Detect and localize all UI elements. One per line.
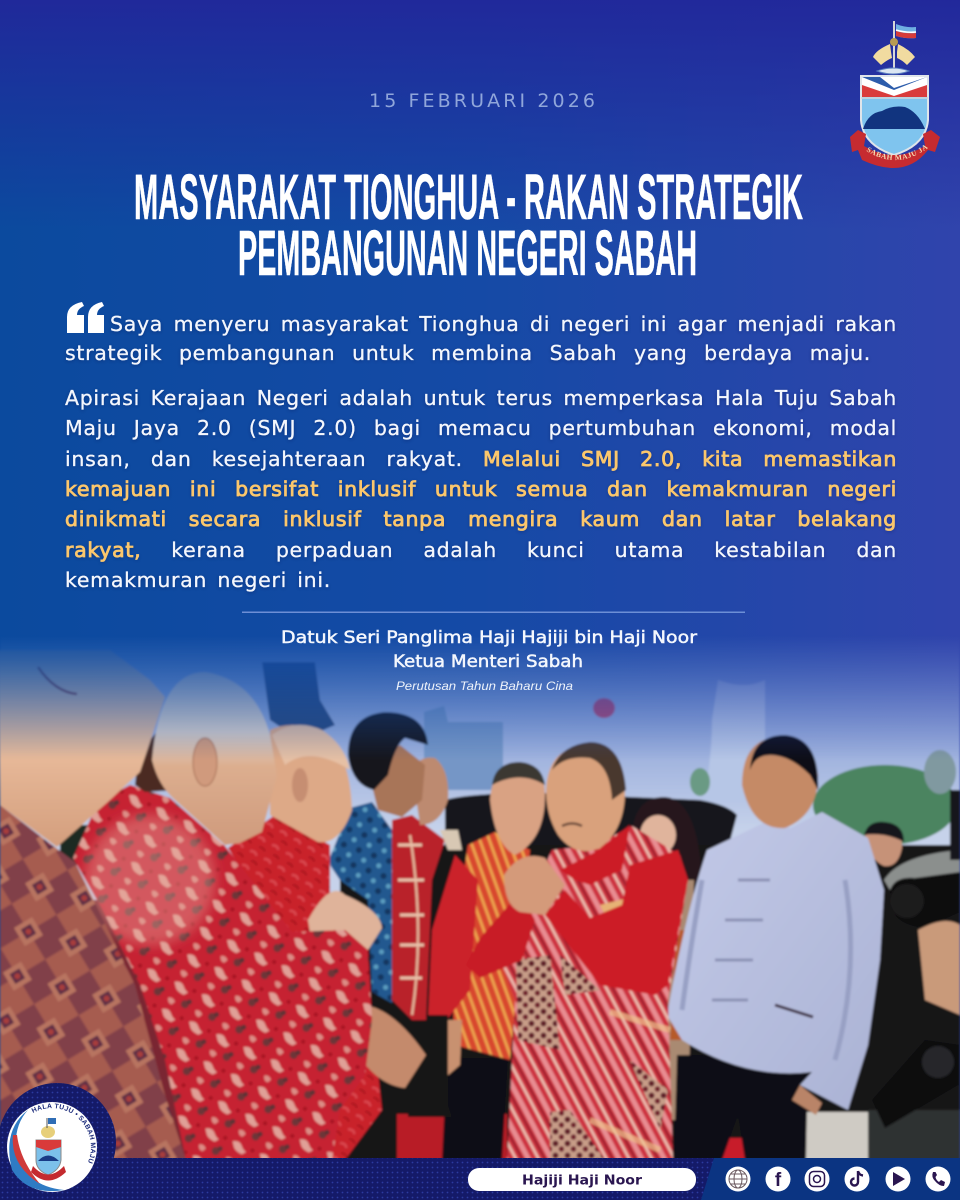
message body copy: rakyat, kerana perpaduan adalah kunci utama kestabilan dan (65, 538, 897, 562)
message body copy: kemajuan ini bersifat inklusif untuk semua dan kemakmuran negeri (65, 477, 897, 501)
footer band left (0, 1158, 730, 1200)
dark gap behind the group (0, 825, 960, 1160)
bald man in red shirt (228, 725, 426, 1160)
Chief Minister in red patterned shirt (466, 742, 688, 1160)
man with glasses in red shirt (392, 758, 462, 1117)
floor (805, 1112, 870, 1160)
attribution source note: Perutusan Tahun Baharu Cina (396, 679, 573, 693)
black car (443, 792, 738, 848)
message body copy: strategik pembangunan untuk membina Sabah yang berdaya maju. (65, 341, 871, 365)
sky backdrop (0, 644, 960, 902)
attribution role: Ketua Menteri Sabah (393, 652, 583, 672)
icon: tiktok (844, 1166, 870, 1192)
message body copy: Saya menyeru masyarakat Tionghua di negeri ini agar menjadi rakan (110, 312, 897, 336)
photo: crowd greeting the Chief Minister (0, 630, 960, 1160)
icon: website globe (726, 1166, 750, 1192)
man in blue batik shirt (328, 712, 428, 1003)
message body copy: Maju Jaya 2.0 (SMJ 2.0) bagi memacu pertumbuhan ekonomi, modal (65, 416, 897, 440)
message body copy (65, 312, 897, 594)
message body copy: kemakmuran negeri ini. (65, 568, 331, 592)
man in silver Chinese-collar shirt (667, 735, 884, 1160)
message body copy: Apirasi Kerajaan Negeri adalah untuk terus memperkasa Hala Tuju Sabah (65, 386, 897, 410)
icon: facebook (766, 1166, 790, 1192)
date: 15 FEBRUARI 2026 (369, 90, 595, 112)
trees (262, 662, 957, 845)
icon: instagram (804, 1166, 830, 1192)
icon: play (886, 1166, 910, 1192)
Sabah state crest (850, 21, 940, 168)
photographer and cameras (864, 790, 960, 1160)
distant towers (424, 706, 503, 790)
name pill label: Hajiji Haji Noor (522, 1172, 642, 1188)
icon: phone (926, 1166, 950, 1192)
attribution name: Datuk Seri Panglima Haji Hajiji bin Haji Noor (281, 628, 697, 648)
message body copy: dinikmati secara inklusif tanpa mengira kaum dan latar belakang (65, 507, 897, 531)
message body copy: insan, dan kesejahteraan rakyat. Melalui SMJ 2.0, kita memastikan (65, 447, 897, 471)
name pill (468, 1168, 696, 1191)
title (134, 161, 803, 289)
quotation mark icon (67, 302, 104, 333)
foreground man in brown batik shirt (0, 650, 186, 1160)
round Hala Tuju badge (0, 1083, 116, 1192)
red lantern (593, 698, 615, 718)
divider line (242, 612, 745, 613)
white pillar (708, 680, 766, 782)
red carpet (397, 1114, 507, 1160)
man in orange striped shirt (428, 762, 545, 1160)
elderly man in red floral shirt (73, 672, 372, 1160)
icon: facebook: f (775, 1170, 782, 1191)
footer band right (701, 1158, 960, 1200)
woman behind the Chief Minister (632, 797, 702, 1120)
